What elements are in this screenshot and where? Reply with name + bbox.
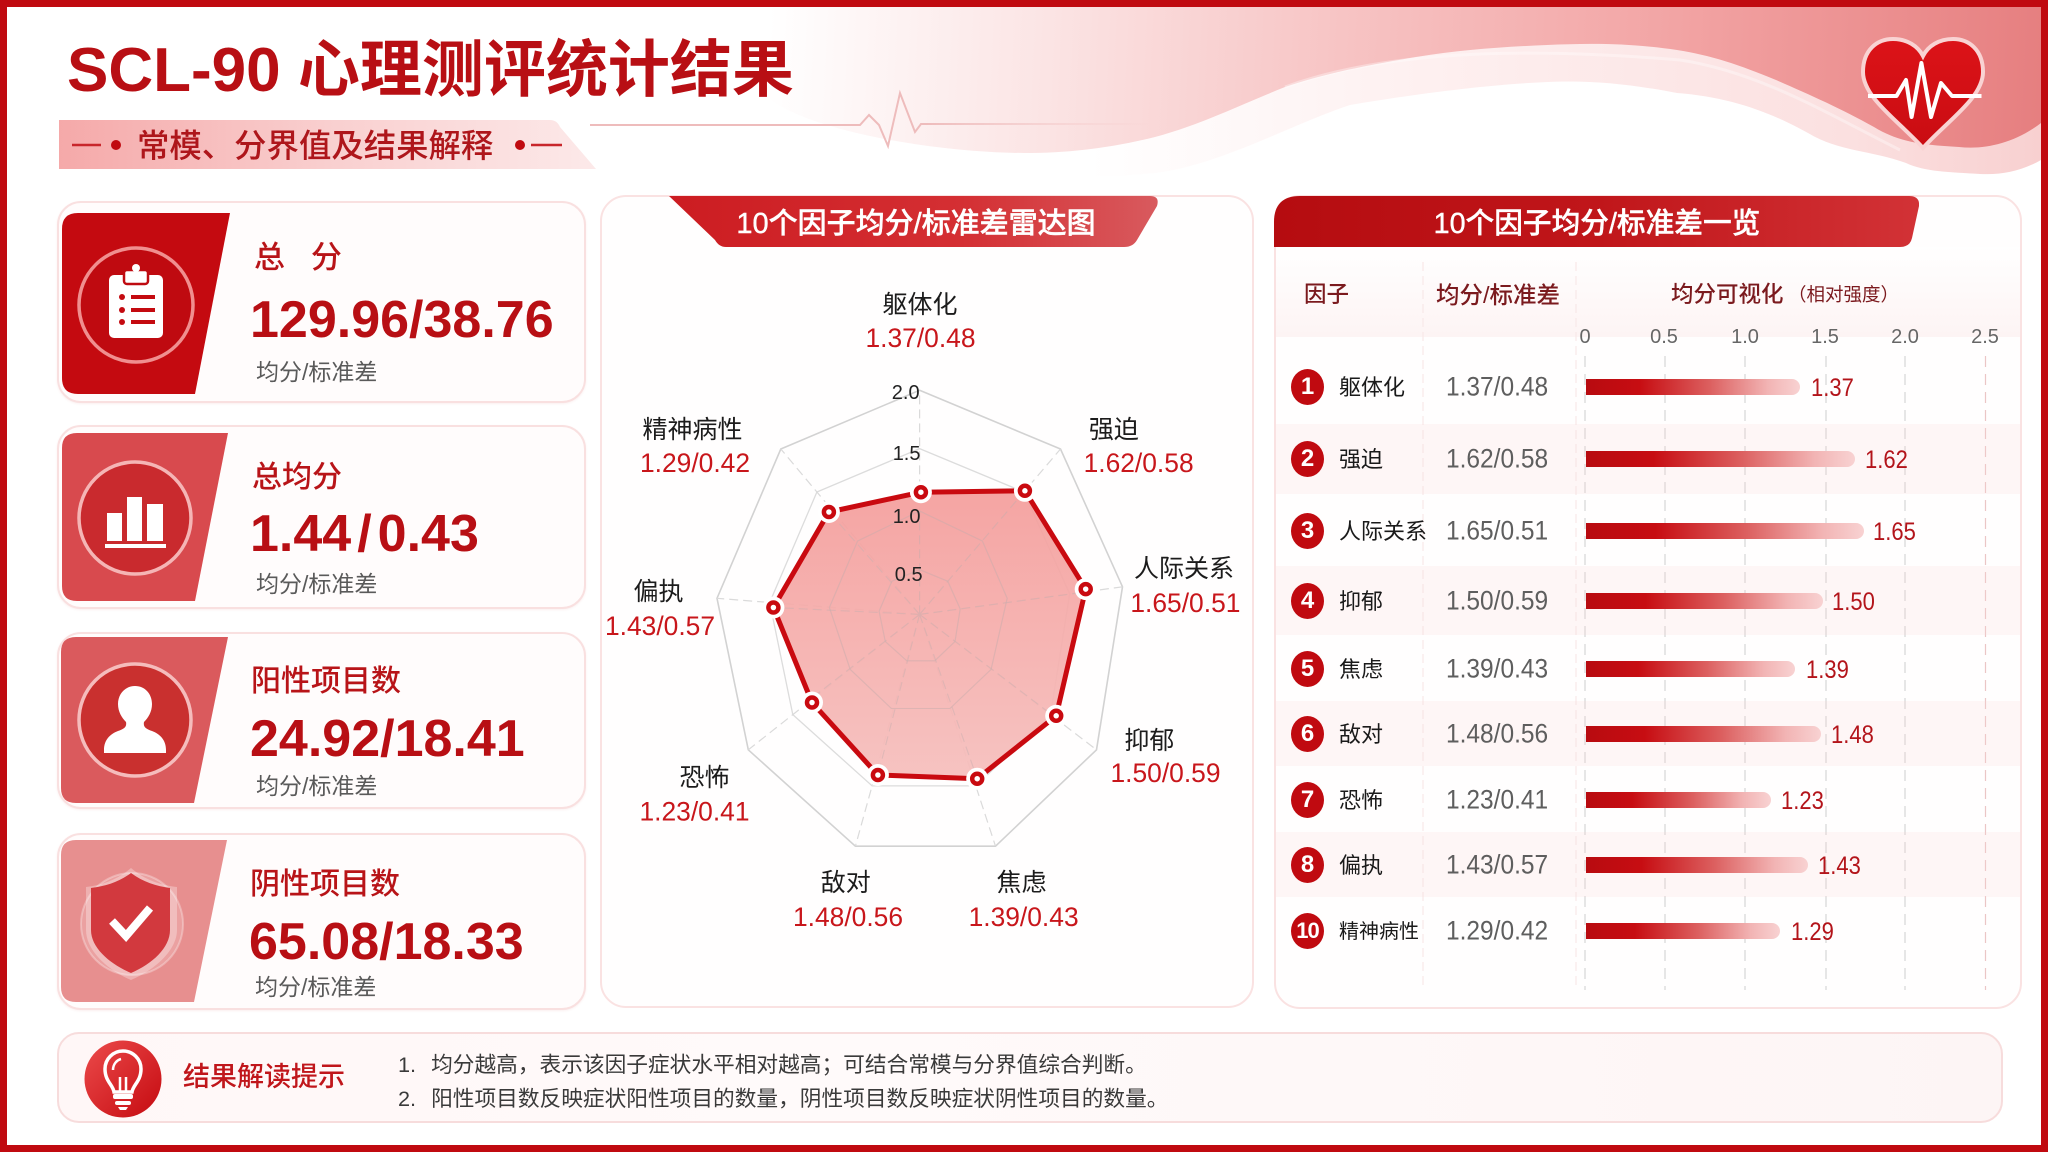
ECG decorative line	[590, 93, 1150, 146]
tips text: 1. 均分越高，表示该因子症状水平相对越高；可结合常模与分界值综合判断。	[398, 1052, 1147, 1077]
row: 精神病性: 10	[1296, 918, 1319, 943]
radar axis labels: 抑郁	[1124, 727, 1174, 755]
table heading ribbon	[1274, 196, 1919, 247]
row: 人际关系: 人际关系	[1339, 519, 1427, 544]
panel: radar chart	[600, 195, 1254, 1008]
value: positive item count: 24.92/18.41	[250, 710, 525, 768]
axis labels and grid: 1.5	[1811, 326, 1839, 348]
row: 焦虑: 1.39/0.43	[1446, 655, 1548, 684]
radar chart: 1.0	[893, 506, 921, 528]
radar axis labels: 1.50/0.59	[1110, 758, 1221, 788]
radar axis labels: 恐怖	[679, 764, 730, 792]
row: 恐怖	[1291, 782, 1824, 818]
radar axis labels: 精神病性	[642, 416, 743, 444]
row: 敌对: 6	[1301, 720, 1314, 746]
row: 恐怖: 1.23	[1781, 786, 1824, 814]
row: 精神病性: 精神病性	[1339, 921, 1419, 943]
radar axis labels: 1.62/0.58	[1084, 448, 1194, 478]
radar axis labels: 偏执	[633, 578, 684, 606]
row: 抑郁: 抑郁	[1339, 588, 1383, 614]
row: 抑郁: 1.50/0.59	[1446, 586, 1548, 616]
row: 敌对: 敌对	[1339, 722, 1383, 746]
row: 偏执: 1.43	[1818, 851, 1861, 879]
label: negative item count: 阴性项目数	[250, 868, 400, 901]
row: 恐怖: 7	[1301, 786, 1314, 812]
note: 均分/标准差	[256, 359, 377, 385]
axis labels and grid: 0.5	[1650, 326, 1678, 348]
row: 偏执: 8	[1301, 850, 1314, 878]
axis labels and grid: 2.5	[1971, 326, 1999, 348]
icon: shield	[61, 840, 227, 1002]
row: 强迫: 强迫	[1339, 447, 1383, 472]
radar axis labels: 1.29/0.42	[640, 448, 750, 478]
icon: clipboard	[62, 213, 230, 394]
row: 焦虑: 5	[1301, 655, 1314, 682]
row: 人际关系	[1291, 513, 1916, 549]
radar chart	[717, 382, 1122, 846]
note: 均分/标准差	[256, 773, 377, 799]
row: 恐怖: 恐怖	[1339, 788, 1383, 812]
axis labels and grid: 0	[1579, 326, 1591, 348]
radar axis labels: 强迫	[1089, 416, 1139, 444]
panel: negative item count card	[57, 833, 586, 1010]
radar axis labels: 人际关系	[1134, 555, 1234, 583]
row: 敌对	[1276, 701, 2020, 766]
radar axis labels: 1.23/0.41	[639, 796, 750, 826]
row: 躯体化	[1291, 369, 1854, 405]
icon: light bulb	[84, 1040, 162, 1118]
title: SCL-90 心理测评统计结果	[67, 36, 794, 105]
radar axis labels: 躯体化	[882, 291, 958, 319]
note: 均分/标准差	[256, 571, 377, 597]
row: 人际关系: 3	[1301, 517, 1314, 544]
tips text: 2. 阳性项目数反映症状阳性项目的数量，阴性项目数反映症状阴性项目的数量。	[398, 1086, 1168, 1111]
radar chart: 0.5	[895, 564, 923, 586]
row: 敌对: 1.48/0.56	[1446, 719, 1548, 749]
icon: person	[61, 637, 228, 803]
header wave background	[590, 7, 2041, 174]
radar axis labels: 焦虑	[996, 869, 1047, 897]
label: total score: 总 分	[254, 240, 342, 275]
label: mean total: 总均分	[252, 461, 342, 494]
note: 均分/标准差	[255, 974, 376, 1000]
tips heading: 结果解读提示	[183, 1062, 345, 1092]
value: total score: 129.96/38.76	[250, 291, 554, 349]
axis labels and grid: 1.0	[1731, 326, 1759, 348]
panel: positive item count card	[57, 632, 586, 809]
radar axis labels: 1.43/0.57	[605, 611, 715, 641]
row: 精神病性: 1.29/0.42	[1446, 917, 1548, 946]
row: 强迫	[1276, 424, 2020, 494]
subtitle ribbon: 常模、分界值及结果解释	[137, 128, 493, 164]
axis labels and grid	[1422, 262, 1999, 990]
radar heading ribbon: 10个因子均分/标准差雷达图	[736, 207, 1096, 240]
row: 人际关系: 1.65	[1873, 517, 1916, 545]
row: 躯体化: 躯体化	[1339, 375, 1405, 400]
icon: heart with ECG	[1861, 37, 1985, 145]
row: 焦虑: 1.39	[1806, 655, 1849, 683]
subtitle ribbon	[59, 120, 596, 169]
radar axis labels	[605, 291, 1240, 932]
radar axis labels: 1.37/0.48	[865, 323, 976, 353]
row: 躯体化: 1.37	[1811, 373, 1854, 401]
radar axis labels: 1.39/0.43	[969, 902, 1079, 932]
row: 焦虑: 焦虑	[1339, 657, 1383, 682]
row: 躯体化: 1	[1301, 373, 1314, 400]
panel: mean total card	[57, 425, 586, 609]
row: 躯体化: 1.37/0.48	[1446, 373, 1548, 402]
tips text	[398, 1052, 1168, 1111]
value: mean total: 1.44/0.43	[250, 505, 479, 563]
row: 偏执: 偏执	[1339, 852, 1383, 878]
row: 强迫: 1.62	[1865, 445, 1908, 473]
panel: factor table	[1274, 195, 2022, 1009]
table header row: 因子	[1304, 282, 1349, 307]
radar axis labels: 1.48/0.56	[793, 902, 903, 932]
radar axis labels: 1.65/0.51	[1130, 588, 1240, 618]
row: 偏执: 1.43/0.57	[1446, 850, 1548, 880]
table header row: （相对强度）	[1788, 284, 1899, 305]
row: 精神病性	[1291, 913, 1834, 949]
icon: bar chart	[62, 433, 228, 601]
table header row: 均分可视化	[1671, 282, 1784, 307]
table heading ribbon: 10个因子均分/标准差一览	[1434, 208, 1760, 240]
radar heading ribbon	[669, 196, 1158, 247]
row: 抑郁: 4	[1301, 586, 1314, 614]
row: 敌对: 1.48	[1831, 720, 1874, 748]
row: 焦虑	[1291, 651, 1849, 687]
table header row	[1276, 247, 2020, 337]
value: negative item count: 65.08/18.33	[249, 913, 524, 971]
row: 恐怖: 1.23/0.41	[1446, 785, 1548, 815]
label: positive item count: 阳性项目数	[251, 665, 401, 698]
axis labels and grid: 2.0	[1891, 326, 1919, 348]
table header row: 均分/标准差	[1436, 282, 1560, 308]
row: 人际关系: 1.65/0.51	[1446, 517, 1548, 546]
row: 精神病性: 1.29	[1791, 917, 1834, 945]
row: 偏执	[1276, 832, 2020, 897]
panel: total score card	[57, 201, 586, 403]
radar axis labels: 敌对	[821, 869, 871, 897]
radar chart: 1.5	[893, 443, 921, 465]
row: 抑郁	[1276, 566, 2020, 635]
row: 抑郁: 1.50	[1832, 587, 1875, 615]
row: 强迫: 2	[1301, 445, 1314, 472]
row: 强迫: 1.62/0.58	[1446, 445, 1548, 474]
panel: result interpretation tips	[57, 1032, 2003, 1123]
radar chart: 2.0	[892, 382, 920, 404]
